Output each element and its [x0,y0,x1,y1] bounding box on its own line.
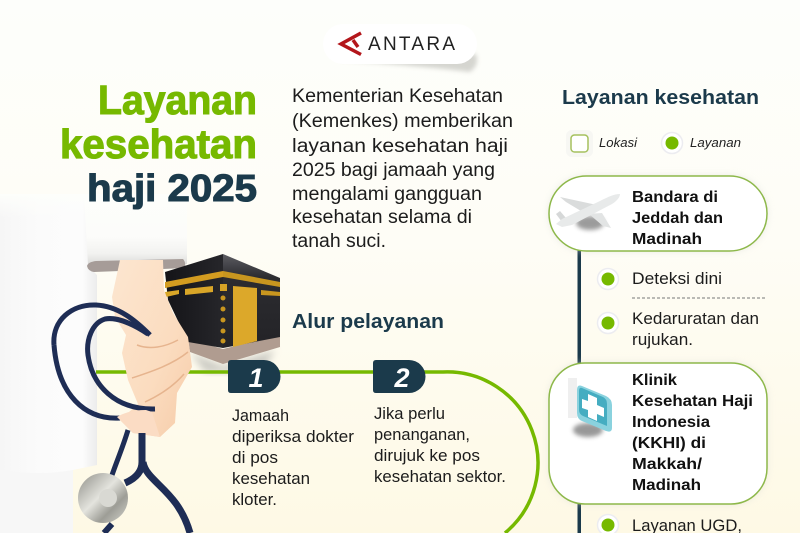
step 2 badge: 2 [393,363,410,393]
card label: Makkah/ [632,456,703,473]
legend [566,130,741,157]
service: Kedaruratan dan rujukan: rujukan. [632,331,693,349]
timeline vertical line [578,250,581,533]
illustration: Kaaba [165,254,280,372]
icon: airplane [556,194,620,230]
step 2 text [374,405,506,486]
legend: Lokasi [599,135,638,150]
intro paragraph: mengalami gangguan [292,184,482,205]
step 1 text: diperiksa dokter [232,428,355,446]
service: Layanan UGD [598,514,742,533]
location card: airport [549,176,767,251]
illustration: hand holding stethoscope [54,260,192,533]
card label [632,372,753,494]
card label: Jeddah dan [632,210,723,227]
illustration: doctor's coat [0,194,190,533]
heading: Layanan kesehatan: Layanan kesehatan [562,87,759,109]
location card: KKHI clinic [549,363,767,504]
icon: medical cross [568,378,612,437]
intro paragraph [292,86,513,252]
logo: ANTARA [323,24,477,72]
step 2 badge [373,360,426,393]
intro paragraph: tanah suci. [292,231,386,252]
step 1 text [232,407,355,509]
title: Layanan [98,77,257,123]
title: kesehatan [60,121,257,167]
intro paragraph: kesehatan selama di [292,207,472,228]
service: Kedaruratan dan rujukan: Kedaruratan dan [632,310,759,328]
card label: Kesehatan Haji [632,393,753,410]
title [60,77,257,210]
card label [632,189,723,248]
card label: Madinah [632,477,701,494]
service: Deteksi dini [598,268,722,290]
step 1 text: Jamaah [232,407,289,425]
card label: Madinah [632,231,702,248]
service: Deteksi dini: Deteksi dini [632,270,722,288]
card label: Bandara di [632,189,718,206]
step 2 text: penanganan, [374,426,470,444]
step 2 text: Jika perlu [374,405,445,423]
step 2 text: kesehatan sektor. [374,468,506,486]
step 2 text: dirujuk ke pos [374,447,480,465]
title: haji 2025 [87,168,257,210]
intro paragraph: (Kemenkes) memberikan [292,111,513,132]
heading: Alur pelayanan: Alur pelayanan [292,311,444,333]
logo: ANTARA: ANTARA [368,34,455,55]
process connector line [96,372,538,533]
step 1 badge: 1 [248,363,264,393]
intro paragraph: 2025 bagi jamaah yang [292,160,495,181]
card label: (KKHI) di [632,435,706,452]
card label: Indonesia [632,414,710,431]
service: Kedaruratan dan rujukan [598,310,759,349]
card label: Klinik [632,372,677,389]
step 1 text: di pos [232,449,278,467]
step 1 text: kloter. [232,491,277,509]
step 1 badge [228,360,280,393]
intro paragraph: Kementerian Kesehatan [292,86,503,107]
step 1 text: kesehatan [232,470,310,488]
intro paragraph: layanan kesehatan haji [292,136,508,157]
legend: Layanan [690,135,741,150]
